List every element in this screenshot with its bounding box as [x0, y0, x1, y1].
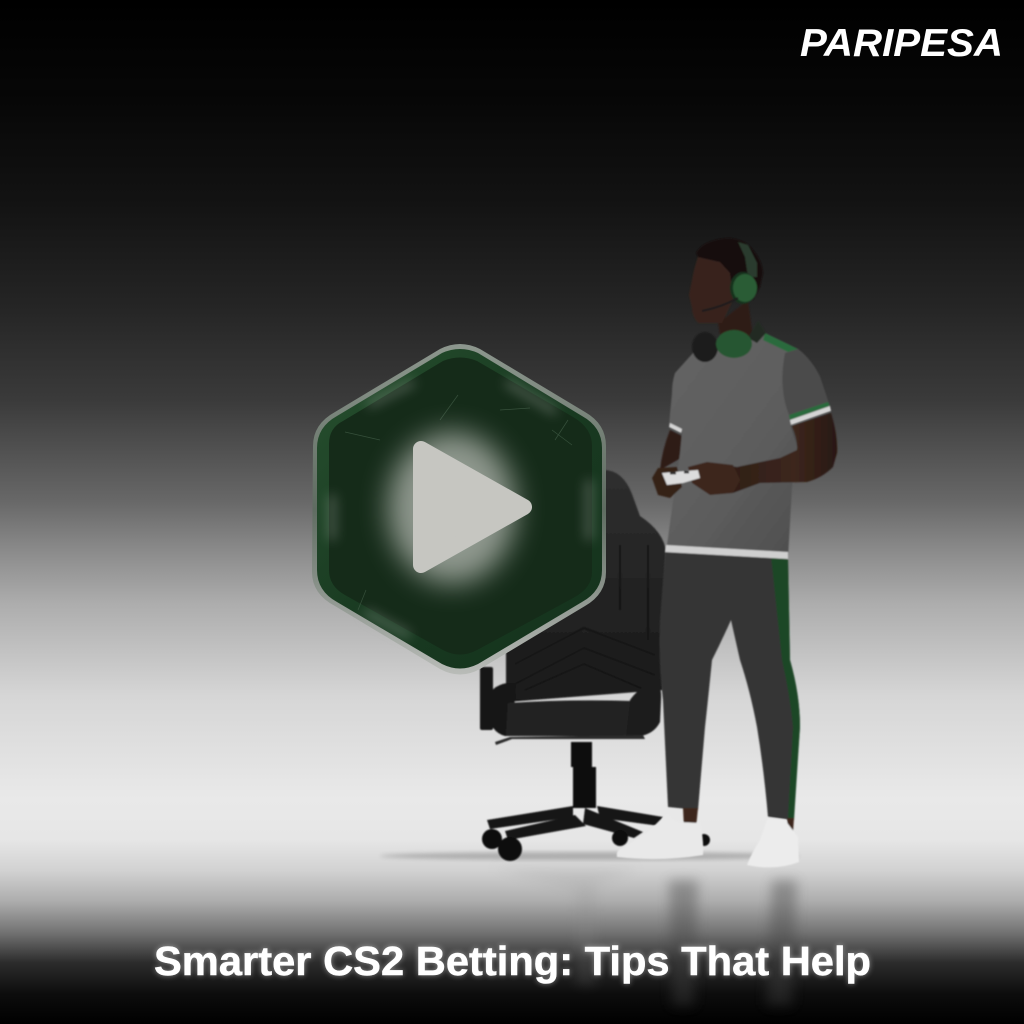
chair casters — [482, 829, 710, 861]
badge scratches — [345, 395, 572, 610]
brand logo: PARIPESA — [800, 22, 1003, 65]
left sleeve cuff — [669, 423, 682, 433]
chair backrest — [506, 470, 666, 702]
face — [689, 257, 733, 323]
chair base — [487, 806, 663, 840]
chair seat cushion — [506, 700, 640, 736]
trouser green stripe — [771, 556, 800, 820]
badge inner face — [329, 358, 592, 654]
chair right bolster — [626, 682, 661, 736]
neck — [718, 300, 753, 337]
sleeve darker panel — [782, 349, 829, 417]
ankles — [683, 808, 794, 832]
trousers — [659, 552, 800, 820]
chair left bolster — [488, 683, 516, 736]
chair lever — [495, 735, 645, 745]
green cup — [716, 330, 752, 358]
left hand — [652, 467, 682, 498]
play button glow — [388, 432, 516, 584]
chair column — [571, 742, 596, 808]
right sneaker — [747, 817, 799, 867]
back arm — [660, 430, 682, 470]
shirt — [665, 333, 831, 558]
game controller — [662, 470, 700, 485]
shirt green shoulder — [763, 333, 798, 352]
neck band — [748, 320, 766, 343]
gamer figure — [617, 238, 837, 867]
badge green rim — [317, 349, 602, 668]
title: Smarter CS2 Betting: Tips That Help — [154, 938, 871, 984]
gaming chair — [480, 470, 710, 861]
hexagon play badge — [312, 344, 606, 674]
floor reflections — [490, 868, 797, 1005]
badge highlights — [332, 382, 589, 636]
chair armrest post — [480, 667, 493, 730]
left sneaker — [617, 813, 703, 859]
sleeve green cuff — [789, 402, 830, 420]
sleeve white cuff — [790, 406, 831, 425]
badge silver edge — [312, 344, 606, 674]
shirt hem — [665, 545, 788, 559]
chair back stitching — [515, 545, 655, 692]
forearm — [730, 413, 837, 493]
headset ear cup — [730, 272, 757, 304]
headset band — [738, 242, 757, 277]
black cup — [692, 332, 718, 362]
headset microphone — [702, 298, 738, 311]
play triangle — [421, 449, 524, 565]
floor shadow — [380, 852, 800, 860]
neck headphones — [692, 320, 766, 362]
hair — [696, 238, 763, 300]
right hand — [688, 462, 740, 495]
